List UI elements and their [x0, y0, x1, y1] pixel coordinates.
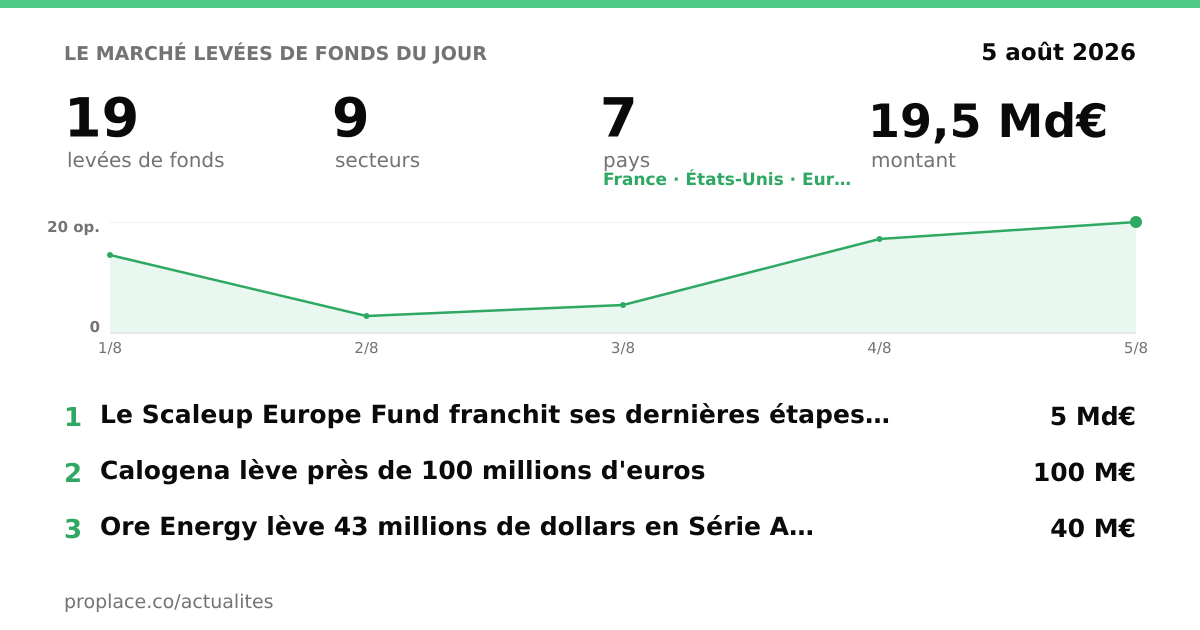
stat: pays	[600, 86, 851, 190]
stat: pays: France · États-Unis · Eur…	[603, 169, 851, 190]
ranked item 2: Calogena lève près de 100 millions d'euros	[100, 456, 705, 485]
stat: levées de fonds: 19	[64, 86, 139, 150]
stat: levées de fonds: levées de fonds	[67, 148, 225, 172]
y axis labels: 0	[90, 318, 100, 336]
line chart	[47, 216, 1148, 357]
x axis labels: 4/8	[867, 339, 892, 357]
ranked item 1: Le Scaleup Europe Fund franchit ses dernières étapes…	[100, 400, 890, 429]
date: 5 août 2026	[981, 40, 1136, 66]
ranked item 3: Ore Energy lève 43 millions de dollars en Série A…	[100, 512, 814, 541]
x axis labels	[98, 339, 1148, 357]
stat: levées de fonds	[64, 86, 225, 172]
stat: secteurs: secteurs	[335, 148, 420, 172]
stat: secteurs: 9	[332, 86, 370, 150]
ranked item 2: 100 M€	[1033, 458, 1136, 487]
ranked item 1: 1	[64, 403, 82, 433]
y axis labels	[47, 218, 100, 336]
stat: secteurs	[332, 86, 420, 172]
stat: montant: montant	[871, 148, 956, 172]
ranked item 1: 5 Md€	[1050, 402, 1136, 431]
ranked item 3: 3	[64, 515, 82, 545]
y axis labels: 20 op.	[47, 218, 100, 236]
ranked item 2	[64, 456, 1136, 489]
stat: pays: 7	[600, 86, 638, 150]
x axis labels: 1/8	[98, 339, 122, 357]
stat: montant: 19,5 Md€	[868, 94, 1108, 148]
x axis labels: 3/8	[611, 339, 635, 357]
chart points	[107, 216, 1142, 319]
ranked item 2: 2	[64, 459, 82, 489]
ranked item 3	[64, 512, 1136, 545]
chart area fill	[110, 222, 1136, 332]
x axis labels: 5/8	[1124, 339, 1148, 357]
ranked item 3: 40 M€	[1050, 514, 1136, 543]
stat: pays: pays	[603, 148, 650, 172]
footer url: proplace.co/actualites	[64, 591, 274, 613]
top accent bar	[0, 0, 1200, 8]
chart line	[110, 222, 1136, 316]
stat: montant	[868, 94, 1108, 172]
ranked item 1	[64, 400, 1136, 433]
heading: LE MARCHÉ LEVÉES DE FONDS DU JOUR	[64, 42, 487, 65]
x axis labels: 2/8	[354, 339, 379, 357]
